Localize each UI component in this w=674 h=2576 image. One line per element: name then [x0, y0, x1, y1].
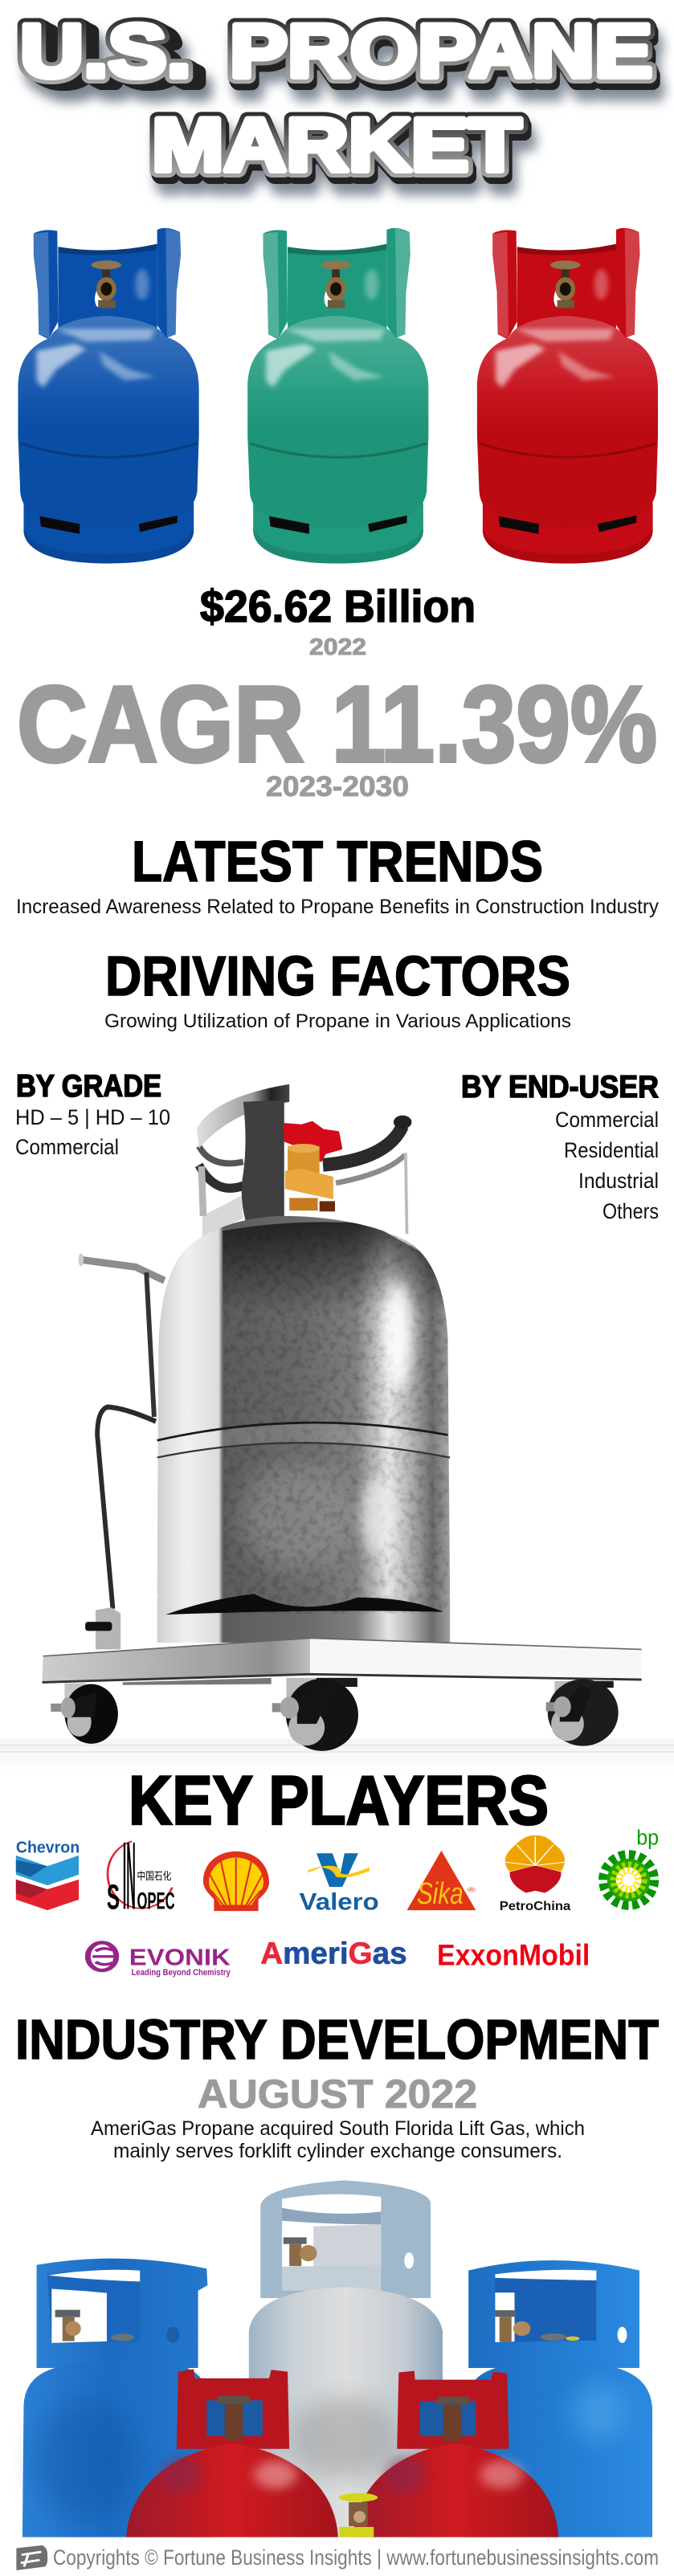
panel: company logos: OPEC: [137, 1888, 175, 1914]
icon: blue cylinder left: [22, 2259, 211, 2537]
logo: Evonik: [88, 1942, 231, 1978]
text: development detail: [91, 2117, 585, 2162]
icon: red cylinder right: [353, 2371, 558, 2537]
icon: wheel centre: [272, 1678, 358, 1751]
logo: Valero: [300, 1853, 379, 1915]
logo: Sika: ®: [468, 1886, 476, 1894]
logo: Chevron: Chevron: [16, 1838, 80, 1856]
logo: bp: bp: [636, 1826, 659, 1850]
title: PROPANE: [230, 8, 652, 93]
text: others: Others: [603, 1199, 659, 1223]
text: residential: Residential: [564, 1138, 659, 1162]
heading: by grade: BY GRADE: [16, 1069, 161, 1104]
logo: Sika: Sika: [417, 1876, 464, 1910]
logo: Sinopec: S: [107, 1878, 120, 1917]
logo: Valero: Valero: [300, 1888, 379, 1915]
panel: by end-user: [461, 1070, 659, 1223]
text: commercial grade: Commercial: [15, 1135, 119, 1159]
logo: AmeriGas: AmeriGas: [260, 1936, 407, 1970]
title: MARKET: [152, 103, 521, 186]
title: U.S.: [20, 8, 191, 93]
title: PROPANE: [230, 8, 652, 93]
logo: bp: [605, 1826, 659, 1904]
icon: silver cylinder: [249, 2180, 443, 2537]
text: development detail: AmeriGas Propane acquired South Florida Lift Gas, which: [91, 2117, 585, 2140]
icon: blue cylinder right: [464, 2260, 652, 2537]
panel: by grade: [15, 1069, 170, 1159]
icon: trolley handle: [79, 1254, 165, 1649]
text: latest trends detail: Increased Awareness Related to Propane Benefits in Construction Industry: [16, 896, 659, 918]
heading: by end-user: BY END-USER: [461, 1070, 659, 1104]
icon: Fortune Business Insights logo: [16, 2545, 47, 2570]
logo: Evonik: Leading Beyond Chemistry: [131, 1968, 231, 1978]
logo: Shell: [203, 1851, 269, 1911]
icon: green cylinder: [247, 228, 428, 564]
title: [20, 8, 652, 186]
icon: blue cylinder: [18, 228, 199, 564]
title: MARKET: [152, 103, 521, 186]
icon: tank collar: [197, 1084, 411, 1239]
text: HD grades: HD – 5 | HD – 10: [15, 1105, 170, 1129]
market size year: 2022: [309, 635, 366, 660]
icon: red valve: [285, 1123, 341, 1211]
icon: red cylinder: [477, 228, 658, 564]
icon: wheel right: [546, 1680, 619, 1746]
logo: PetroChina: PetroChina: [500, 1900, 571, 1913]
icon: yellow valve: [339, 2493, 378, 2537]
icon: tank body: [157, 1216, 450, 1643]
icon: wheel left: [51, 1684, 118, 1744]
text: development detail: mainly serves forklift cylinder exchange consumers.: [113, 2140, 562, 2162]
logo: Evonik: EVONIK: [129, 1945, 231, 1970]
group of coloured cylinders: [22, 2180, 652, 2537]
icon: red cylinder left: [126, 2369, 338, 2537]
text: driving factors detail: Growing Utilization of Propane in Various Applications: [104, 1010, 571, 1032]
text: industrial: Industrial: [578, 1169, 659, 1193]
three coloured cylinders: [18, 228, 658, 564]
heading: latest trends: LATEST TRENDS: [132, 831, 543, 894]
heading: key players: KEY PLAYERS: [129, 1762, 549, 1839]
panel: company logos: [16, 1823, 659, 1978]
title: U.S.: [20, 8, 191, 93]
icon: trolley platform: [43, 1638, 642, 1685]
panel: company logos: IN: [123, 1823, 136, 1930]
logo: Sinopec: [107, 1823, 175, 1930]
market size value: $26.62 Billion: [200, 581, 476, 631]
big propane tank on trolley: [0, 1084, 674, 1775]
logo: Chevron: [16, 1838, 80, 1910]
heading: driving factors: DRIVING FACTORS: [105, 945, 570, 1007]
footer: copyright: [16, 2545, 659, 2570]
CAGR period: 2023-2030: [266, 771, 409, 802]
logo: Sika: [407, 1851, 476, 1910]
text: commercial: Commercial: [555, 1108, 659, 1132]
date: august 2022: AUGUST 2022: [198, 2072, 477, 2117]
logo: PetroChina: [500, 1835, 571, 1913]
logo: Sinopec: 中国石化: [137, 1870, 171, 1882]
